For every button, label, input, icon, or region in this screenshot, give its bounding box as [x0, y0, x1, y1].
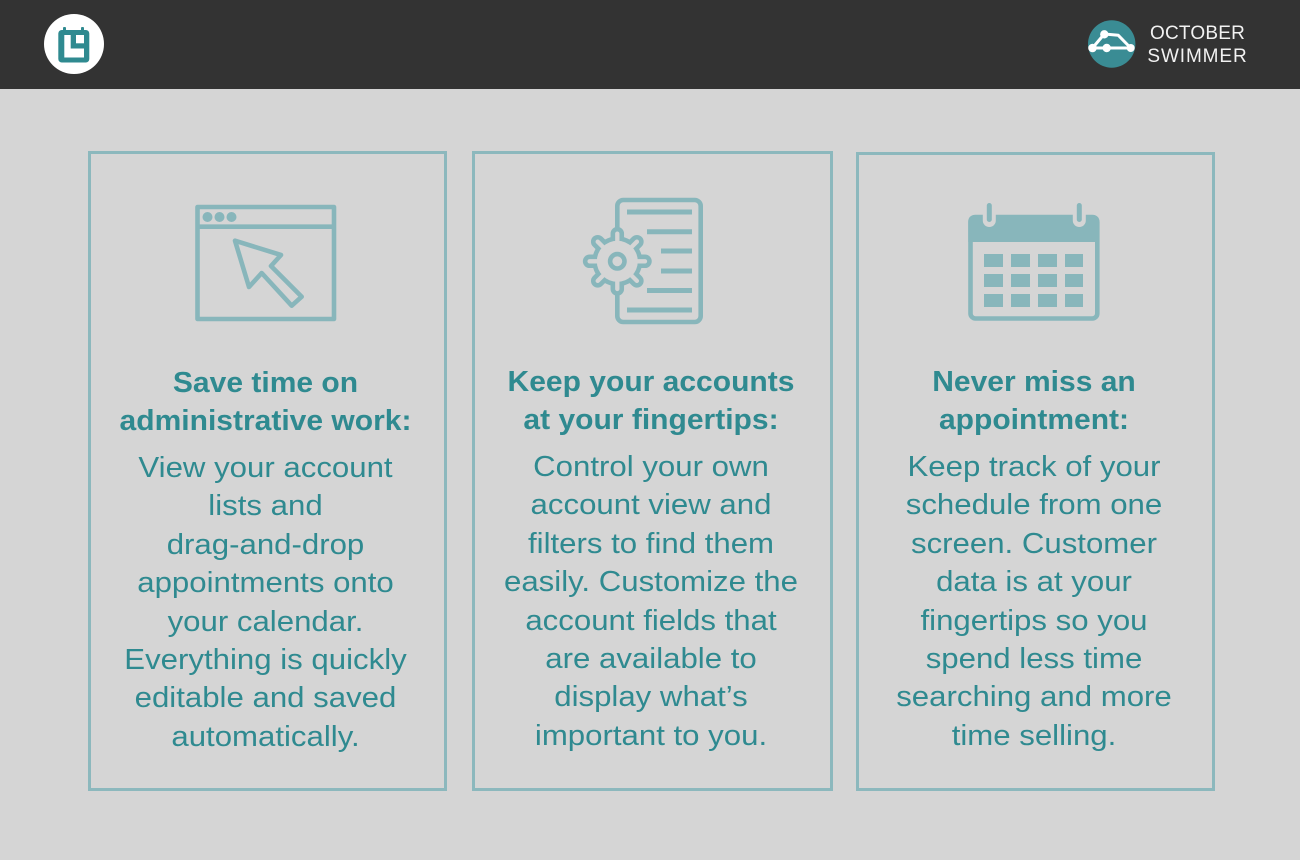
icon: browser window with cursor: [195, 204, 336, 322]
text: accounts description: important to you.: [535, 720, 767, 752]
brand logo: October Swimmer: [1088, 20, 1248, 68]
icon: calendar: [968, 203, 1100, 321]
icon: app calendar logo: [44, 14, 104, 74]
text: accounts description: [504, 451, 798, 752]
text: appointments description: Keep track of your: [908, 451, 1160, 483]
text: save time description: your calendar.: [168, 606, 363, 638]
heading: appointments: [932, 366, 1136, 436]
text: save time description: lists and: [208, 490, 323, 522]
header bar: [0, 0, 1300, 89]
brand name: [1147, 23, 1248, 67]
text: appointments description: data is at your: [936, 566, 1132, 598]
text: appointments description: spend less time: [926, 643, 1142, 675]
text: accounts description: Control your own: [533, 451, 769, 483]
heading: accounts: Keep your accounts: [508, 366, 794, 398]
text: accounts description: are available to: [545, 643, 757, 675]
text: save time description: View your account: [138, 452, 393, 484]
text: appointments description: fingertips so you: [920, 605, 1147, 637]
brand name: OCTOBER: [1150, 23, 1245, 44]
panel: appointments: [856, 152, 1215, 791]
text: accounts description: easily. Customize the: [504, 566, 798, 598]
heading: appointments: appointment:: [939, 404, 1129, 436]
text: save time description: automatically.: [171, 721, 360, 753]
text: accounts description: account view and: [531, 489, 771, 521]
text: save time description: [124, 452, 407, 753]
text: save time description: editable and saved: [135, 682, 396, 714]
heading: save time: Save time on: [173, 367, 358, 399]
panel: save time: [88, 151, 447, 791]
heading: appointments: Never miss an: [932, 366, 1136, 398]
text: appointments description: [896, 451, 1172, 752]
heading: save time: [120, 367, 411, 437]
heading: accounts: at your fingertips:: [523, 404, 779, 436]
brand name: SWIMMER: [1147, 46, 1248, 67]
text: save time description: drag-and-drop: [167, 529, 364, 561]
text: save time description: Everything is quickly: [124, 644, 407, 676]
text: appointments description: screen. Customer: [911, 528, 1157, 560]
text: appointments description: schedule from one: [906, 489, 1162, 521]
text: save time description: appointments onto: [137, 567, 394, 599]
text: accounts description: account fields that: [525, 605, 777, 637]
heading: save time: administrative work:: [120, 405, 411, 437]
panel: accounts: [472, 151, 833, 791]
text: accounts description: display what’s: [554, 681, 748, 713]
heading: accounts: [508, 366, 794, 436]
icon: October Swimmer mark: [1088, 20, 1136, 68]
text: accounts description: filters to find them: [528, 528, 774, 560]
icon: document with gear: [582, 198, 703, 324]
text: appointments description: searching and more: [896, 681, 1172, 713]
text: appointments description: time selling.: [952, 720, 1116, 752]
